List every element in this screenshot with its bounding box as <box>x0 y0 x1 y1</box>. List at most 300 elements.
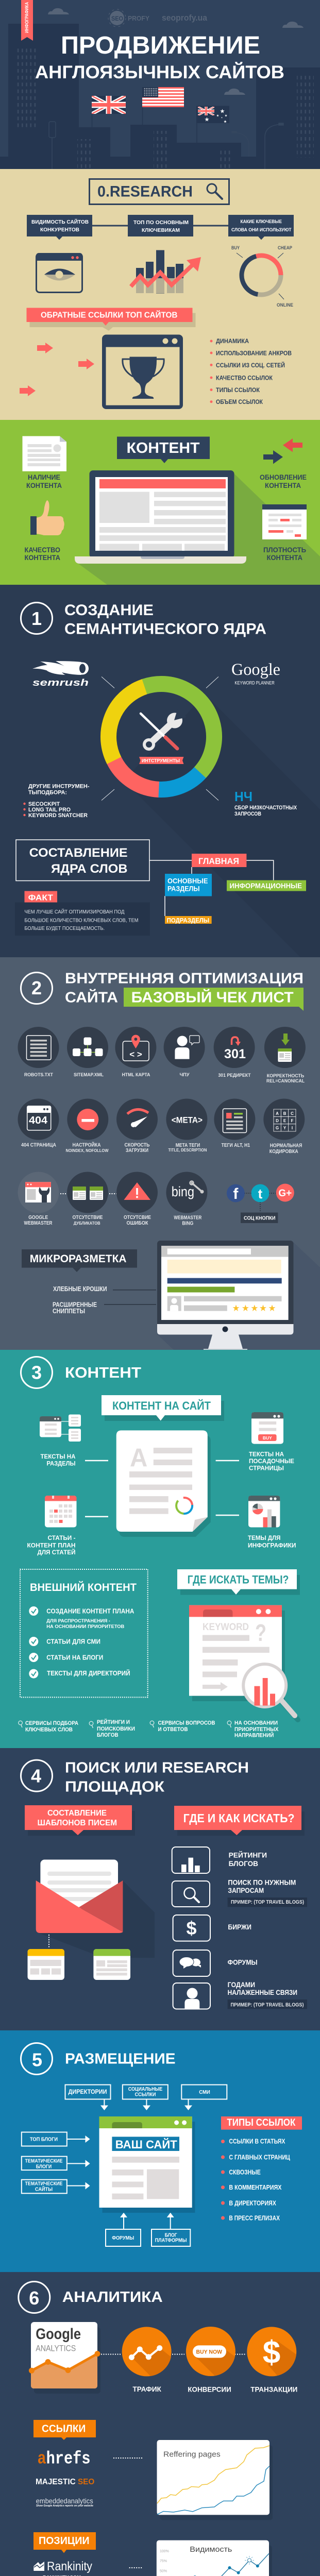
box: composing the keyword core: ЯДРА СЛОВ <box>51 862 128 876</box>
step number 2: 2 <box>31 977 42 998</box>
logo: Majestic SEO: MAJESTIC SEO <box>36 2478 94 2486</box>
text: other tools list: LONG TAIL PRO <box>28 807 71 813</box>
item: content updates: ОБНОВЛЕНИЕ <box>260 473 307 481</box>
callout: links tools <box>33 2420 96 2440</box>
box: external content: СОЗДАНИЕ КОНТЕНТ ПЛАНА <box>46 1607 134 1615</box>
social buttons: G+ <box>278 1188 292 1199</box>
icon: crossed wrench and screwdriver <box>141 708 187 751</box>
checklist item: no errors <box>116 1172 158 1226</box>
checklist item: load speed: СКОРОСТЬ <box>125 1142 149 1148</box>
logo: Google Keyword Planner: KEYWORD PLANNER <box>234 681 275 686</box>
dotted link to referring pages chart <box>113 2458 142 2459</box>
callout: competitor visibility: КОНКУРЕНТОВ <box>40 227 79 233</box>
list: link types <box>221 2116 302 2222</box>
tree node: main sections: ОСНОВНЫЕ <box>167 877 208 885</box>
icon: template window green <box>93 1949 130 1980</box>
item: section texts <box>40 1415 81 1467</box>
label: breadcrumbs: ХЛЕБНЫЕ КРОШКИ <box>53 1285 107 1293</box>
checklist item: sitemap.xml: SITEMAP.XML <box>74 1072 104 1078</box>
checklist item: encoding: B <box>283 1111 287 1116</box>
checklist item: 301 redirect: 301 РЕДИРЕКТ <box>218 1073 251 1078</box>
source box: forums <box>106 2229 141 2246</box>
panel: research <box>0 169 320 420</box>
logo: SEO Profy: SEO <box>111 15 123 22</box>
source box: blog platforms: ПЛАТФОРМЫ <box>155 2238 187 2244</box>
heading: content callout: КОНТЕНТ <box>127 440 200 456</box>
chart: keyword donut: CHEAP <box>278 245 292 250</box>
metric: conversions: КОНВЕРСИИ <box>188 2385 231 2394</box>
source box: media: СМИ <box>199 2089 210 2095</box>
chart: visibility: Видимость <box>190 2545 232 2554</box>
illustration: search window with magnifier <box>189 1605 298 1720</box>
checklist item: encoding <box>263 1098 305 1155</box>
callout: top keywords <box>128 215 193 236</box>
item: content updates <box>260 438 307 489</box>
source box: blog platforms: БЛОГ <box>165 2232 177 2238</box>
item: blog ratings: РЕЙТИНГИ И <box>97 1719 130 1725</box>
text: other tools list <box>23 783 90 819</box>
checklist item: sitemap.xml <box>67 1027 108 1078</box>
item: keyword services: СЕРВИСЫ ПОДБОРА <box>25 1720 78 1726</box>
checklist item: rel=canonical: REL=CANONICAL <box>266 1078 305 1084</box>
clouds <box>48 8 304 95</box>
heading: on-page optimization <box>65 971 304 1011</box>
chart: keyword donut: ONLINE <box>277 302 293 308</box>
item: content quality: КОНТЕНТА <box>25 553 60 562</box>
step number 5 <box>21 2043 53 2074</box>
logo: embedded analytics: Show Google Analytics reports on your website <box>36 2504 93 2507</box>
callout: which keywords <box>228 215 294 240</box>
checklist item: Google Webmaster: WEBMASTER <box>24 1221 53 1226</box>
metric: traffic: ТРАФИК <box>132 2385 161 2393</box>
icon: browser with eye <box>36 253 82 293</box>
text: low-frequency queries: СБОР НИЗКОЧАСТОТНЫХ <box>234 805 297 811</box>
heading: content callout <box>117 437 210 463</box>
chart: visibility <box>157 2540 272 2576</box>
item: blog ratings: ПОИСКОВИКИ <box>97 1726 135 1732</box>
logo: SEO Profy: seoprofy.ua <box>162 13 208 23</box>
checklist item: encoding: Y <box>283 1126 287 1130</box>
illustration: envelope with letter <box>36 1860 155 1958</box>
tree node: main sections <box>165 874 212 896</box>
chart: ranking bars with arrow <box>131 250 201 294</box>
text: other tools list: SECOCKPIT <box>28 801 60 807</box>
checklist item: rel=canonical <box>264 1027 306 1084</box>
illustration: search window with magnifier: ? <box>255 1619 266 1646</box>
box: external content: ВНЕШНИЙ КОНТЕНТ <box>30 1581 137 1594</box>
text: low-frequency queries <box>234 789 297 817</box>
source box: top blogs <box>22 2132 67 2146</box>
callout: fact: ФАКТ <box>28 893 53 902</box>
item: infographic topics: ТЕМЫ ДЛЯ <box>248 1534 280 1541</box>
flag: Australia: ★ <box>225 114 227 117</box>
step number 1: 1 <box>31 608 42 629</box>
heading: analytics: АНАЛИТИКА <box>62 2289 163 2306</box>
logo: embedded analytics: embeddedanalytics <box>36 2497 93 2505</box>
callout: where and how to search <box>174 1806 305 1836</box>
checklist item: encoding: E <box>283 1118 287 1123</box>
arrows into site window <box>68 2099 192 2229</box>
chart: tools donut <box>87 662 236 811</box>
callout: which keywords: КАКИЕ КЛЮЧЕВЫЕ <box>240 219 282 225</box>
checklist item: 404 page: 404 <box>29 1115 48 1126</box>
label: rich snippets: РАСШИРЕННЫЕ <box>53 1300 97 1308</box>
source: keyword search: ПОИСК ПО НУЖНЫМ <box>228 1879 296 1887</box>
source: exchanges: $ <box>186 1918 197 1939</box>
ribbon: infographic tag <box>21 0 33 41</box>
checklist item: HTML map: < > <box>129 1049 142 1059</box>
checklist item: HTML map <box>115 1027 156 1078</box>
checklist item: noindex nofollow: НАСТРОЙКА <box>72 1141 101 1148</box>
item: section texts: РАЗДЕЛЫ <box>46 1460 75 1467</box>
step number 4: 4 <box>31 1766 41 1787</box>
item: landing page texts: ТЕКСТЫ НА <box>249 1450 284 1458</box>
checklist item: meta tags: <META> <box>172 1115 203 1125</box>
source box: thematic blogs: ТЕМАТИЧЕСКИЕ <box>25 2158 63 2164</box>
callout: competitor visibility <box>27 215 92 240</box>
heading: on-page optimization: САЙТА <box>65 988 118 1006</box>
chart: referring pages <box>157 2440 273 2520</box>
source: established contacts <box>173 1981 307 2009</box>
chart: visibility: 50% <box>160 2570 167 2573</box>
illustration: document: A <box>130 1443 147 1472</box>
metric: traffic <box>122 2327 172 2393</box>
flag: Australia: ★ <box>221 116 223 118</box>
source box: thematic sites <box>22 2180 67 2193</box>
callout: where and how to search: ГДЕ И КАК ИСКАТЬ? <box>183 1811 295 1825</box>
checklist item: encoding: G <box>276 1126 279 1130</box>
illustration: desktop monitor with search snippet: ★ <box>260 1304 267 1312</box>
dotted link from envelope <box>48 1935 49 1948</box>
heading: semantic core: СЕМАНТИЧЕСКОГО ЯДРА <box>64 620 266 638</box>
checklist item: friendly URLs <box>164 1027 205 1078</box>
checklist item: no duplicates <box>67 1172 108 1226</box>
text: low-frequency queries: НЧ <box>234 789 252 804</box>
heading: microdata: МИКРОРАЗМЕТКА <box>30 1253 126 1265</box>
source: forums: ФОРУМЫ <box>228 1958 258 1966</box>
checklist item: no errors: ОШИБОК <box>127 1221 148 1226</box>
source box: directories <box>65 2084 110 2099</box>
panel: header with city skyline <box>0 0 320 169</box>
heading: content: КОНТЕНТ <box>65 1365 141 1381</box>
source box: thematic sites: ТЕМАТИЧЕСКИЕ <box>25 2180 63 2187</box>
callout: content for the site: КОНТЕНТ НА САЙТ <box>112 1399 211 1412</box>
item: content presence <box>23 436 66 489</box>
checklist item: encoding: НОРМАЛЬНАЯ <box>270 1143 302 1149</box>
step number 4 <box>21 1760 53 1791</box>
item: priority directions: ПРИОРИТЕТНЫХ <box>234 1726 279 1733</box>
step number 5: 5 <box>32 2049 42 2071</box>
checklist item: Bing webmaster: bing <box>172 1184 194 1199</box>
checklist item: Google Webmaster: GOOGLE <box>28 1215 48 1221</box>
checklist item: meta tags: TITLE, DESCRIPTION <box>168 1147 207 1153</box>
social buttons: f <box>233 1185 239 1202</box>
callout: top keywords: ТОП ПО ОСНОВНЫМ <box>133 219 189 226</box>
item: questions and answers services: СЕРВИСЫ ВОПРОСОВ <box>158 1720 215 1726</box>
logo: SEMrush: semrush <box>32 677 89 688</box>
checklist item: meta tags <box>166 1098 207 1153</box>
panel: step 6 analytics <box>0 2272 320 2576</box>
checklist item: noindex nofollow <box>66 1098 109 1153</box>
source box: social links <box>123 2084 168 2099</box>
flag: Australia: ★ <box>220 109 225 114</box>
item: landing page texts: ПОСАДОЧНЫЕ <box>249 1458 294 1465</box>
checklist item: encoding: A <box>276 1111 279 1116</box>
item: infographic topics: ИНФОГРАФИКИ <box>248 1542 296 1549</box>
tree node: home page <box>192 854 246 867</box>
icon: template window yellow <box>28 1949 64 1980</box>
heading: semantic core: СОЗДАНИЕ <box>64 602 154 619</box>
source box: directories: ДИРЕКТОРИИ <box>68 2089 107 2095</box>
metric: transactions: ТРАНЗАКЦИИ <box>250 2385 297 2394</box>
source box: social links: СОЦИАЛЬНЫЕ <box>128 2086 162 2092</box>
item: blog ratings: БЛОГОВ <box>97 1732 119 1738</box>
tree node: subsections: ПОДРАЗДЕЛЫ <box>167 917 209 924</box>
illustration: desktop monitor with search snippet: ★ <box>268 1304 276 1312</box>
item: landing page texts: BUY <box>263 1435 272 1440</box>
item: content density: КОНТЕНТА <box>267 553 302 562</box>
checklist item: encoding: C <box>291 1111 294 1116</box>
skyline buildings <box>0 24 320 169</box>
text: other tools list: ДРУГИЕ ИНСТРУМЕН- <box>28 783 90 789</box>
checklist item: robots.txt <box>18 1027 59 1078</box>
icon: browser with trophy <box>102 335 183 409</box>
item: content quality: КАЧЕСТВО <box>25 546 60 554</box>
callout: email templates: ШАБЛОНОВ ПИСЕМ <box>37 1819 117 1827</box>
source: exchanges <box>173 1915 251 1941</box>
box: external content: СТАТЬИ ДЛЯ СМИ <box>46 1638 100 1646</box>
illustration: your site window <box>99 2116 195 2213</box>
list: backlink metrics: ТИПЫ ССЫЛОК <box>216 386 260 394</box>
title: АНГЛОЯЗЫЧНЫХ САЙТОВ <box>35 62 284 82</box>
list: backlink metrics: КАЧЕСТВО ССЫЛОК <box>216 374 273 381</box>
step number 6: 6 <box>29 2287 39 2309</box>
flag: Australia <box>196 106 229 143</box>
source box: media <box>181 2084 227 2099</box>
box: external content: НА ОСНОВАНИИ ПРИОРИТЕТОВ <box>46 1624 124 1630</box>
ribbon: tools: ИНТСТРУМЕНТЫ <box>142 758 180 764</box>
heading: 0.RESEARCH search box <box>90 179 229 204</box>
checklist item: no errors: ОТСУТСВИЕ <box>124 1215 151 1221</box>
item: blog ratings <box>89 1719 135 1738</box>
source: keyword search <box>172 1879 307 1907</box>
illustration: laptop with page layout <box>75 470 246 564</box>
item: keyword services <box>19 1720 78 1733</box>
chart: visibility: 100% <box>160 2550 169 2553</box>
checklist item: alt and h1 tags <box>214 1098 255 1148</box>
list: backlink metrics: ДИНАМИКА <box>216 337 249 345</box>
heading: research of placements: ПОИСК ИЛИ RESEARCH <box>65 1759 249 1776</box>
checklist item: encoding: D <box>276 1118 279 1123</box>
checklist item: load speed: ЗАГРУЗКИ <box>126 1148 148 1154</box>
text: low-frequency queries: ЗАПРОСОВ <box>234 811 261 817</box>
logo: Google Keyword Planner: Google <box>231 660 280 679</box>
heading: research of placements <box>65 1759 249 1795</box>
list: backlink metrics: ОБЪЕМ ССЫЛОК <box>216 398 263 405</box>
list: backlink metrics <box>210 337 292 405</box>
logo: SEO Profy: PROFY <box>128 14 149 22</box>
item: content updates: КОНТЕНТА <box>265 481 301 489</box>
checklist item: 404 page <box>18 1098 59 1148</box>
checklist item: 301 redirect <box>214 1027 255 1078</box>
item: priority directions <box>227 1720 279 1738</box>
source: keyword search: ЗАПРОСАМ <box>228 1887 264 1894</box>
social buttons <box>227 1184 294 1223</box>
checklist item: 404 page: 404 СТРАНИЦА <box>21 1142 56 1148</box>
callout: where to look for topics: ГДЕ ИСКАТЬ ТЕМЫ? <box>188 1573 289 1586</box>
box: external content: ДЛЯ РАСПРОСТРАНЕНИЯ - <box>46 1618 110 1624</box>
item: articles content plan <box>27 1496 76 1556</box>
panel: step 3 content <box>0 1350 320 1748</box>
metric: transactions: $ <box>263 2335 280 2370</box>
connector lines to document <box>85 1461 239 1517</box>
callout: fact: БОЛЬШОЕ КОЛИЧЕСТВО КЛЮЧЕВЫХ СЛОВ, ТЕМ <box>25 918 138 923</box>
metric: conversions: BUY NOW <box>196 2349 223 2355</box>
callout: links tools: ССЫЛКИ <box>42 2424 86 2435</box>
dotted link to visibility chart <box>129 2567 143 2568</box>
dotted links between row three icons <box>60 1193 116 1194</box>
box: composing the keyword core <box>16 840 149 881</box>
checklist item: encoding: I <box>292 1126 293 1130</box>
callout: top keywords: КЛЮЧЕВИКАМ <box>142 227 180 233</box>
callout: fact <box>15 891 150 936</box>
checklist item: Google Webmaster <box>18 1172 59 1226</box>
label: rich snippets: СНИППЕТЫ <box>53 1307 85 1315</box>
item: questions and answers services <box>150 1720 215 1733</box>
source: blog ratings: РЕЙТИНГИ <box>229 1851 267 1859</box>
item: content quality <box>25 500 64 562</box>
step number 3: 3 <box>31 1362 42 1383</box>
callout: email templates: СОСТАВЛЕНИЕ <box>47 1809 107 1818</box>
heading: research of placements: ПЛОЩАДОК <box>65 1779 164 1795</box>
flag: United Kingdom <box>92 96 126 127</box>
source: exchanges: БИРЖИ <box>228 1923 251 1931</box>
source: established contacts: НАЛАЖЕННЫЕ СВЯЗИ <box>228 1989 297 1996</box>
flag: United States <box>142 87 184 125</box>
illustration: desktop monitor with search snippet: ★ <box>242 1304 249 1312</box>
heading: semantic core <box>64 602 266 638</box>
checklist item: 301 redirect: 301 <box>224 1047 246 1061</box>
card: Google Analytics: Google <box>36 2326 81 2343</box>
callout: positions tools <box>33 2532 96 2553</box>
item: content presence: НАЛИЧИЕ <box>28 473 60 481</box>
banner: backlinks of top sites <box>27 308 196 331</box>
checklist item: noindex nofollow: NOINDEX, NOFOLLOW <box>66 1148 109 1153</box>
illustration: desktop monitor with search snippet: ★ <box>232 1304 240 1312</box>
chart: keyword donut: BUY <box>231 245 240 250</box>
callout: fact: БОЛЬШЕ БУДЕТ ПОСЕЩАЕМОСТЬ. <box>25 926 105 931</box>
checklist item: meta tags: МЕТА ТЕГИ <box>176 1143 200 1148</box>
item: keyword services: КЛЮЧЕВЫХ СЛОВ <box>25 1727 73 1733</box>
item: landing page texts: СТРАНИЦЫ <box>249 1465 284 1472</box>
chart: referring pages: Reffering pages <box>163 2450 221 2459</box>
tree node: informational: ИНФОРМАЦИОННЫЕ <box>230 882 302 890</box>
text: other tools list: ТЫПОДБОРА: <box>28 789 67 795</box>
item: section texts: ТЕКСТЫ НА <box>40 1453 76 1460</box>
checklist item: Bing webmaster: BING <box>182 1221 194 1227</box>
heading: on-page optimization: БАЗОВЫЙ ЧЕК ЛИСТ <box>131 988 294 1006</box>
logo: SEO Profy <box>108 9 208 27</box>
illustration: desktop monitor with search snippet: ★ <box>251 1304 258 1312</box>
traffic light and street lamps <box>49 122 283 169</box>
text: other tools list: KEYWORD SNATCHER <box>28 812 88 819</box>
item: content density <box>262 504 307 562</box>
checklist item: no duplicates: ДУБЛИКАТОВ <box>74 1221 100 1226</box>
list: link types: В КОММЕНТАРИЯХ <box>229 2184 282 2191</box>
source: keyword search: ПРИМЕР: (TOP TRAVEL BLOGS) <box>231 1900 304 1905</box>
item: questions and answers services: И ОТВЕТОВ <box>158 1726 188 1733</box>
box: external content: СТАТЬИ НА БЛОГИ <box>46 1654 103 1662</box>
card: Google Analytics <box>29 2322 100 2394</box>
checklist item: encoding: КОДИРОВКА <box>270 1149 298 1155</box>
checklist item: Bing webmaster <box>166 1172 207 1227</box>
checklist item: rel=canonical: КОРРЕКТНОСТЬ <box>267 1073 304 1079</box>
banner: backlinks of top sites: ОБРАТНЫЕ ССЫЛКИ ТОП САЙТОВ <box>41 310 177 319</box>
list: backlink metrics: ССЫЛКИ ИЗ СОЦ. СЕТЕЙ <box>216 361 285 369</box>
metric: transactions <box>247 2327 297 2394</box>
box: external content <box>20 1569 148 1697</box>
list: link types: В ПРЕСС РЕЛИЗАХ <box>229 2215 280 2222</box>
connector bar between callouts <box>88 225 237 227</box>
source box: top blogs: ТОП БЛОГИ <box>30 2136 58 2142</box>
item: landing page texts <box>249 1412 294 1472</box>
item: articles content plan: КОНТЕНТ ПЛАН <box>27 1542 75 1549</box>
callout: which keywords: СЛОВА ОНИ ИСПОЛЬЗУЮТ <box>231 227 292 233</box>
item: articles content plan: ДЛЯ СТАТЕЙ <box>37 1548 75 1556</box>
source box: thematic blogs: БЛОГИ <box>36 2164 52 2170</box>
tree node: home page: ГЛАВНАЯ <box>198 856 239 866</box>
illustration: your site window: ВАШ САЙТ <box>115 2138 177 2151</box>
callout: fact: ЧЕМ ЛУЧШЕ САЙТ ОПТИМИЗИРОВАН ПОД <box>25 908 125 915</box>
source: established contacts: ПРИМЕР: (TOP TRAVEL BLOGS) <box>231 2002 304 2008</box>
source box: thematic sites: САЙТЫ <box>35 2185 53 2192</box>
illustration: desktop monitor with search snippet <box>157 1241 294 1350</box>
list: backlink metrics: ИСПОЛЬЗОВАНИЕ АНКРОВ <box>216 349 292 357</box>
item: content presence: КОНТЕНТА <box>26 481 62 489</box>
logo: SEMrush <box>32 661 89 688</box>
panel: step 2 on-page optimization <box>0 957 320 1350</box>
label: rich snippets <box>53 1300 156 1315</box>
item: content density: ПЛОТНОСТЬ <box>263 546 306 554</box>
panel: step 4 research of placements <box>0 1748 320 2030</box>
callout: competitor visibility: ВИДИМОСТЬ САЙТОВ <box>31 218 89 225</box>
heading: on-page optimization: ВНУТРЕННЯЯ ОПТИМИЗАЦИЯ <box>65 971 304 987</box>
item: infographic topics <box>248 1496 296 1549</box>
list: link types: В ДИРЕКТОРИЯХ <box>229 2200 276 2207</box>
dotted links between metrics <box>101 2354 246 2355</box>
callout: content for the site <box>102 1395 224 1421</box>
checklist item: no duplicates: ОТСУТСТВИЕ <box>72 1215 103 1221</box>
list: link types: ТИПЫ ССЫЛОК <box>227 2117 296 2128</box>
heading: 0.RESEARCH search box: 0.RESEARCH <box>97 183 193 200</box>
item: priority directions: НА ОСНОВАНИИ <box>234 1720 278 1726</box>
checklist item: robots.txt: ROBOTS.TXT <box>24 1072 53 1078</box>
callout: email templates <box>25 1805 135 1836</box>
title <box>35 32 284 82</box>
box: composing the keyword core: СОСТАВЛЕНИЕ <box>29 846 128 860</box>
source: established contacts: ГОДАМИ <box>228 1981 255 1989</box>
source box: thematic blogs <box>22 2157 67 2170</box>
metric: conversions <box>186 2327 235 2394</box>
checklist item: Bing webmaster: WEBMASTER <box>174 1215 202 1221</box>
step number 1 <box>21 603 53 634</box>
title: ПРОДВИЖЕНИЕ <box>61 32 260 59</box>
panel: step 1 semantic core <box>0 585 320 957</box>
list: link types: СКВОЗНЫЕ <box>229 2169 261 2176</box>
illustration: search window with magnifier: KEYWORD <box>203 1622 249 1633</box>
tree node: main sections: РАЗДЕЛЫ <box>167 885 200 892</box>
list: link types: ССЫЛКИ В СТАТЬЯХ <box>229 2138 285 2145</box>
